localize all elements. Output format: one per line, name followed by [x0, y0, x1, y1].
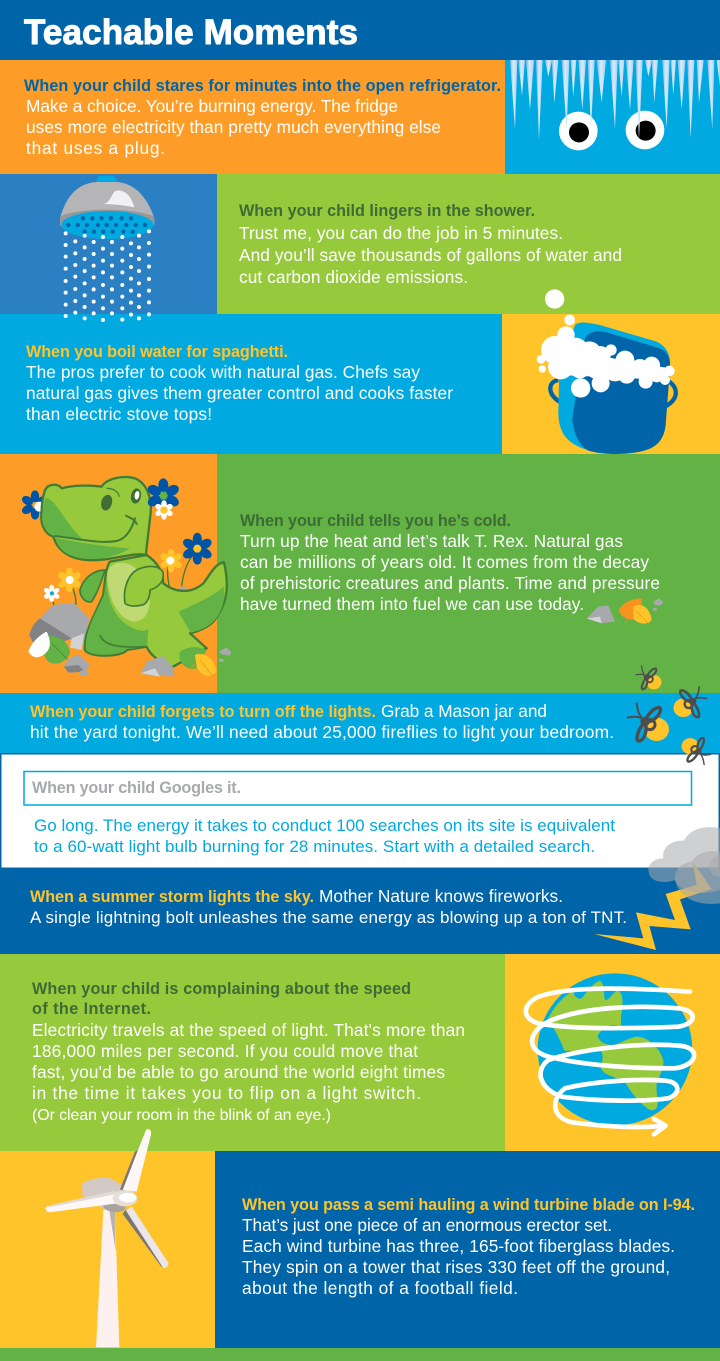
search box	[24, 772, 692, 805]
text: wind turbine: about the length of a football field.	[242, 1278, 518, 1298]
text: refrigerator: that uses a plug.	[26, 138, 165, 158]
dino head	[41, 477, 151, 560]
icon: globe with swirl arrow	[526, 973, 694, 1134]
icon: staring eyes	[559, 111, 664, 150]
icon: wind turbine	[46, 1129, 169, 1347]
flowers	[20, 490, 213, 605]
text: storm: When a summer storm lights the sky.	[30, 888, 314, 906]
panel: internet speed background	[0, 954, 720, 1151]
text: refrigerator	[24, 77, 501, 158]
text: cold: When your child tells you he’s cold.	[240, 512, 511, 530]
text: lights: Grab a Mason jar and	[381, 701, 547, 721]
text: Googles: Go long. The energy it takes to conduct 100 searches on its site is equivalent	[34, 816, 615, 835]
head flowers	[146, 478, 181, 520]
text: internet speed: Electricity travels at the speed of light. That's more than	[32, 1020, 465, 1040]
text: shower: And you’ll save thousands of gallons of water and	[239, 245, 622, 265]
water drops	[66, 231, 149, 320]
text: internet speed: When your child is complaining about the speed	[32, 980, 411, 998]
panel: shower background	[0, 174, 720, 314]
text: shower: Trust me, you can do the job in 5 minutes.	[239, 223, 563, 243]
text: cold	[240, 512, 660, 614]
text: storm	[30, 886, 627, 927]
text: lights	[30, 701, 614, 742]
icon: fireflies	[628, 666, 710, 764]
text: cold: have turned them into fuel we can use today.	[240, 594, 584, 614]
icon: icicles	[510, 60, 720, 140]
panel: wind turbine background	[0, 1151, 720, 1348]
text: internet speed: in the time it takes you to flip on a light switch.	[32, 1083, 421, 1103]
text: storm: A single lightning bolt unleashes the same energy as blowing up a ton of TNT.	[30, 908, 627, 927]
text: wind turbine: Each wind turbine has three, 165-foot fiberglass blades.	[242, 1236, 675, 1256]
text: spaghetti	[26, 343, 453, 424]
text: cold: Turn up the heat and let’s talk T. Rex. Natural gas	[240, 531, 623, 551]
text: wind turbine	[242, 1196, 695, 1298]
panel: lights background	[0, 693, 720, 753]
panel: cold background	[0, 454, 720, 693]
text: shower	[239, 202, 622, 287]
text: Googles: to a 60-watt light bulb burning for 28 minutes. Start with a detailed search.	[34, 837, 595, 856]
text: shower: When your child lingers in the shower.	[239, 202, 535, 220]
rocks and leaves in front	[28, 632, 231, 677]
text: wind turbine: When you pass a semi hauling a wind turbine blade on I-94.	[242, 1196, 695, 1214]
text: storm: Mother Nature knows fireworks.	[319, 886, 563, 906]
text: cold: of prehistoric creatures and plants. Time and pressure	[240, 573, 660, 593]
text: internet speed: 186,000 miles per second. If you could move that	[32, 1041, 418, 1061]
text: internet speed: fast, you'd be able to go around the world eight times	[32, 1062, 445, 1082]
text: wind turbine: That’s just one piece of an enormous erector set.	[242, 1215, 612, 1235]
search query: When your child Googles it.	[32, 779, 241, 797]
text: spaghetti: than electric stove tops!	[26, 404, 212, 424]
text: shower: cut carbon dioxide emissions.	[239, 267, 468, 287]
text: Googles	[34, 816, 615, 856]
header band	[0, 0, 720, 60]
text: lights: When your child forgets to turn off the lights.	[30, 703, 376, 721]
dino body	[85, 555, 227, 668]
panel: Googles	[1, 754, 719, 868]
icon: storm cloud and lightning	[594, 827, 720, 950]
panel: spaghetti background	[0, 314, 720, 454]
text: internet speed: (Or clean your room in the blink of an eye.)	[32, 1107, 331, 1124]
illustration: T. Rex	[20, 477, 231, 677]
text: spaghetti: The pros prefer to cook with natural gas. Chefs say	[26, 362, 420, 382]
rocks behind	[29, 586, 192, 650]
text: refrigerator: Make a choice. You’re burning energy. The fridge	[26, 96, 398, 116]
panel: storm background	[0, 869, 720, 954]
text: internet speed	[32, 980, 465, 1124]
text: spaghetti: When you boil water for spaghetti.	[26, 343, 288, 361]
text: cold: can be millions of years old. It comes from the decay	[240, 552, 649, 572]
text: spaghetti: natural gas gives them greater control and cooks faster	[26, 383, 453, 403]
text: lights: hit the yard tonight. We’ll need about 25,000 fireflies to light your bedroom.	[30, 722, 614, 742]
text: refrigerator: When your child stares for minutes into the open refrigerator.	[24, 77, 501, 95]
icon: rock and autumn leaves	[587, 598, 663, 625]
text: refrigerator: uses more electricity than pretty much everything else	[26, 117, 441, 137]
panel: refrigerator	[0, 60, 720, 174]
text: wind turbine: They spin on a tower that rises 330 feet off the ground,	[242, 1257, 670, 1277]
icon: shower head	[60, 176, 154, 320]
icon: boiling pot	[537, 289, 676, 454]
text: internet speed: of the Internet.	[32, 1000, 151, 1018]
bottom band	[0, 1348, 720, 1361]
title: Teachable Moments	[24, 13, 358, 52]
